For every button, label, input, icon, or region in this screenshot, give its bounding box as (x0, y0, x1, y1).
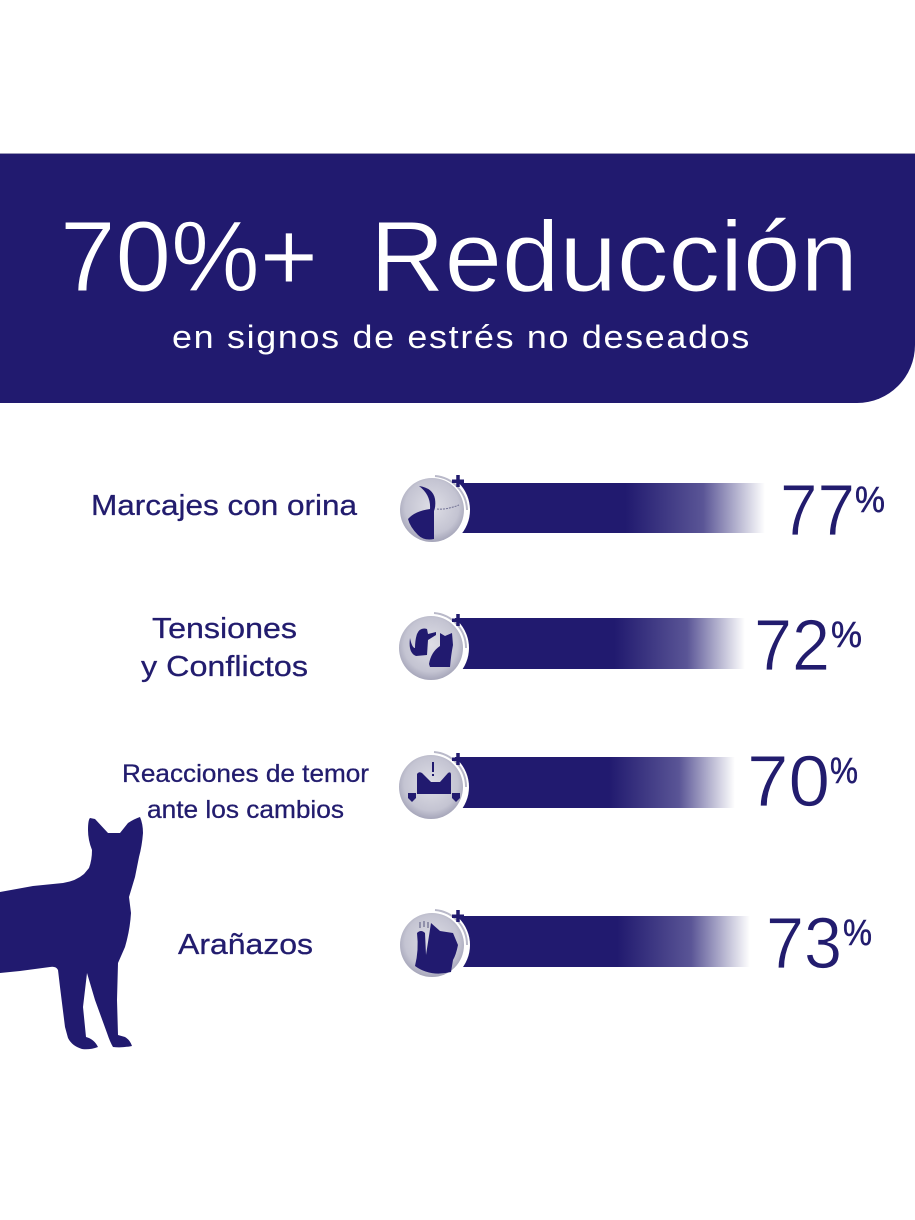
row: Marcajes con orina (91, 471, 885, 551)
icon: cat tail (394, 472, 470, 548)
icon: scratching cat (394, 907, 470, 983)
value: % (831, 614, 862, 655)
icon: frightened cat peeking (393, 749, 469, 825)
label: Tensiones (152, 613, 297, 645)
bar (455, 483, 765, 533)
value: 73 (766, 904, 842, 984)
label (141, 613, 308, 683)
value: % (830, 750, 858, 791)
value: 70 (747, 742, 830, 822)
header banner (0, 153, 915, 403)
bar (455, 916, 750, 967)
title: 70%+ (60, 201, 318, 313)
value: 72 (754, 606, 830, 686)
title: Reducción (370, 201, 858, 313)
value: % (843, 912, 872, 953)
icon: two cats (393, 610, 469, 686)
value: % (855, 479, 885, 520)
row: Tensiones y Conflictos (141, 606, 862, 686)
value: 77 (780, 471, 855, 551)
row: Arañazos (178, 904, 872, 984)
title (60, 201, 858, 313)
label: Reacciones de temor (122, 760, 369, 788)
row: Reacciones de temor (122, 742, 858, 825)
label: y Conflictos (141, 651, 308, 683)
label: Arañazos (178, 929, 313, 961)
label: Marcajes con orina (91, 490, 358, 522)
subtitle: en signos de estrés no deseados (172, 319, 751, 355)
bar (455, 618, 745, 669)
bar (455, 757, 735, 808)
cat silhouette (0, 817, 143, 1049)
label (122, 760, 369, 824)
label: ante los cambios (147, 796, 344, 824)
